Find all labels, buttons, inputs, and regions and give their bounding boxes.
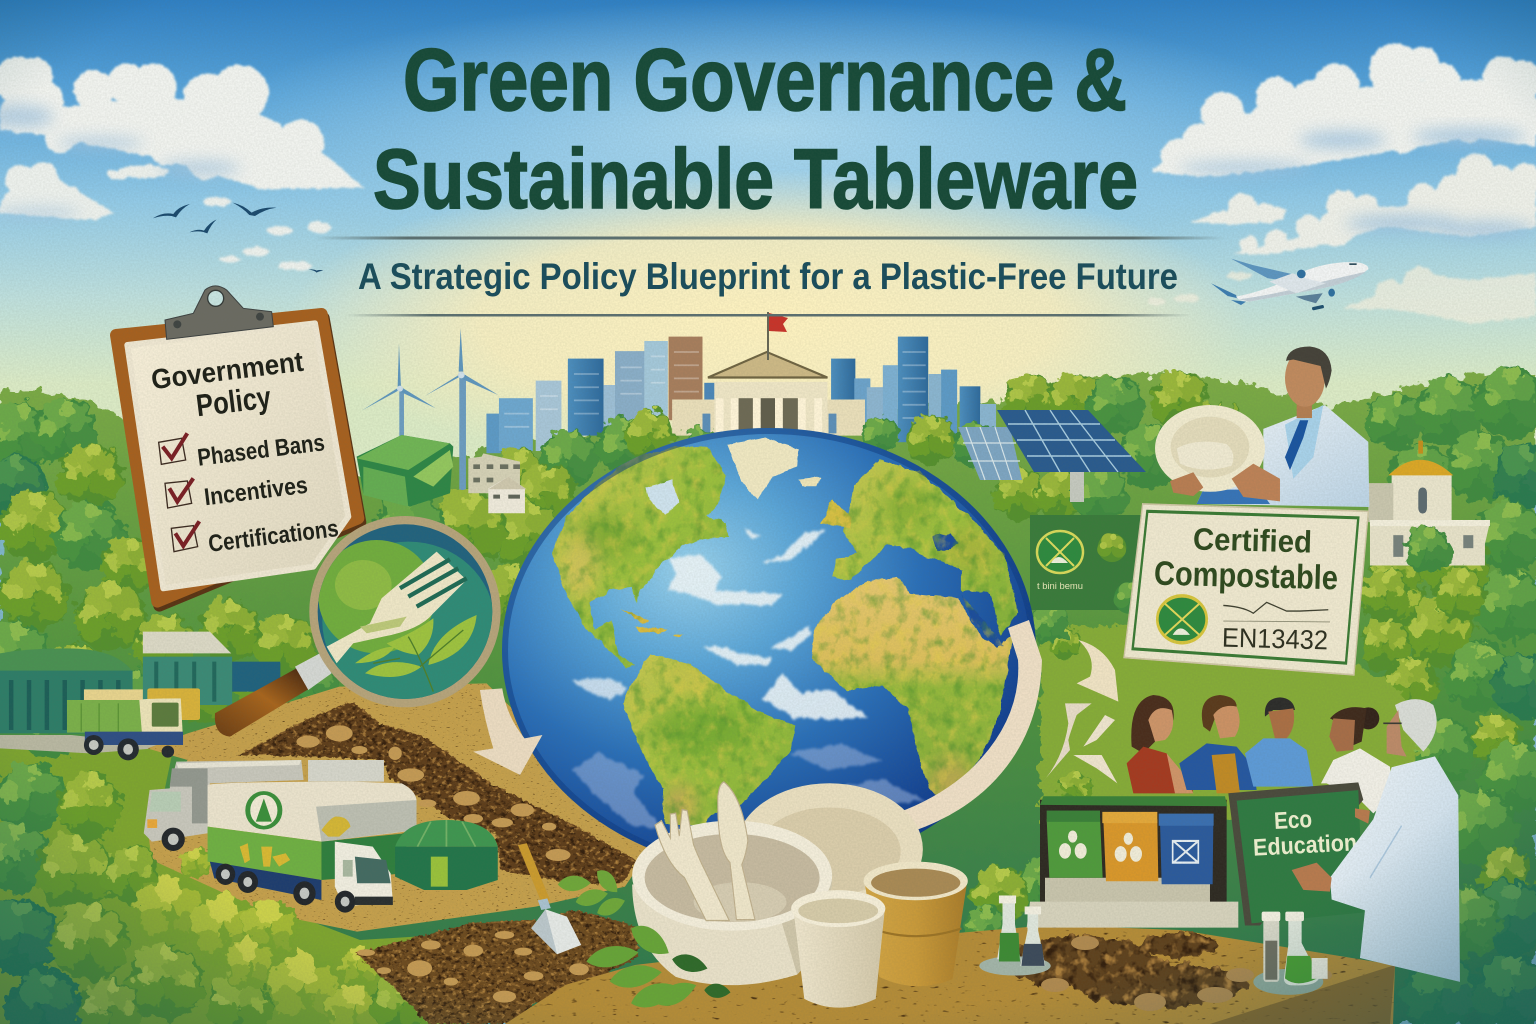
fork <box>655 810 729 921</box>
shrubs in front of house <box>1359 526 1486 620</box>
green building <box>357 435 453 507</box>
metal clip <box>165 286 273 339</box>
handle <box>215 668 310 737</box>
certified compostable sign <box>1124 504 1368 675</box>
title line 2: Sustainable Tableware <box>373 132 1138 226</box>
bowl <box>632 880 832 985</box>
distant forest base <box>0 371 1536 1024</box>
cargo box <box>208 782 417 842</box>
bottom-left yellow trees <box>0 761 467 1024</box>
wind turbines <box>362 328 498 497</box>
skyline and capitol <box>486 337 996 453</box>
scientist with plate <box>1155 347 1369 507</box>
trees on lawn edge <box>962 549 1421 952</box>
large compost truck <box>208 782 417 913</box>
green banner: t bini bemu <box>1037 581 1083 591</box>
knife <box>718 782 755 920</box>
recycling arrow left <box>473 688 542 775</box>
plate <box>736 783 923 915</box>
lab flasks <box>1253 912 1328 995</box>
audience group <box>1127 695 1437 813</box>
eco education board: Eco <box>1273 806 1313 835</box>
continents <box>552 447 1019 827</box>
clipboard text: Certifications <box>207 515 340 558</box>
small buildings <box>468 453 527 513</box>
certified compostable sign: Certified <box>1193 521 1312 560</box>
clipboard text: Government <box>149 346 305 395</box>
clipboard <box>116 286 360 606</box>
eco education board: Education <box>1252 829 1358 862</box>
lens <box>318 524 492 699</box>
lawn left of path <box>0 740 520 1024</box>
greenland and arctic ice <box>645 438 820 515</box>
certified compostable sign: Compostable <box>1154 555 1338 597</box>
ground path <box>0 683 652 932</box>
recycling arrow right <box>817 620 1118 850</box>
white cup <box>794 911 885 1008</box>
head <box>1285 350 1325 407</box>
recycling emblem <box>248 793 280 828</box>
cab <box>335 842 393 907</box>
capitol building <box>672 352 865 436</box>
title <box>373 30 1138 226</box>
clouds right <box>1147 43 1536 323</box>
top rule <box>315 236 1225 240</box>
skyline buildings <box>486 337 996 453</box>
green banner <box>1030 515 1146 614</box>
biodigester dome <box>395 820 498 890</box>
subtitle: A Strategic Policy Blueprint for a Plastic-Free Future <box>358 256 1178 297</box>
clipboard text: Incentives <box>203 472 309 511</box>
board <box>118 318 360 606</box>
gold cup <box>865 884 967 986</box>
airplane <box>1211 259 1368 311</box>
small flasks <box>979 895 1051 976</box>
lower rule <box>345 314 1190 316</box>
trees behind the globe <box>360 372 1237 636</box>
solar panels <box>958 410 1146 502</box>
eco education board <box>1228 782 1363 925</box>
birds <box>153 203 323 273</box>
green bin <box>1047 811 1103 878</box>
coat <box>1197 405 1369 507</box>
leaves in front <box>585 918 731 1013</box>
magnifying glass <box>215 516 501 737</box>
certified compostable sign: EN13432 <box>1222 623 1328 655</box>
right lawn <box>1040 625 1420 830</box>
person 5 head <box>1383 699 1437 757</box>
orange bin <box>1102 812 1158 881</box>
fork <box>327 552 467 663</box>
soil pile <box>239 702 638 1024</box>
compost plant domes <box>0 632 280 733</box>
leaves behind bowl <box>558 865 627 920</box>
tableware <box>558 782 968 1013</box>
trees left forest <box>0 399 337 759</box>
blue bin <box>1159 814 1214 884</box>
sky background <box>0 0 1536 480</box>
person 3 <box>1245 697 1313 787</box>
recycling station bins <box>1027 796 1238 928</box>
leaves <box>355 615 477 677</box>
clouds left <box>0 57 365 270</box>
trees right forest <box>1365 366 1536 1024</box>
title line 1: Green Governance & <box>403 30 1127 129</box>
ocean clouds <box>570 528 869 719</box>
house with dome <box>1368 441 1490 566</box>
teacher scientist coat <box>1292 756 1460 982</box>
hands <box>1170 472 1203 496</box>
rim <box>309 516 501 707</box>
shovel <box>518 843 581 954</box>
person 1 <box>1127 695 1193 793</box>
checkboxes <box>159 433 199 552</box>
clipboard text: Policy <box>194 379 273 423</box>
globe <box>502 428 1036 872</box>
plate <box>1155 405 1265 492</box>
clipboard text: Phased Bans <box>196 429 326 472</box>
person 2 <box>1179 695 1257 793</box>
person 4 <box>1321 707 1392 813</box>
clipboard text <box>149 346 340 558</box>
flag <box>767 312 788 360</box>
bottom soil ground <box>505 925 1395 1024</box>
paper <box>127 323 348 588</box>
small delivery truck <box>67 689 183 760</box>
grey truck <box>144 760 384 851</box>
ocean <box>502 428 1036 872</box>
